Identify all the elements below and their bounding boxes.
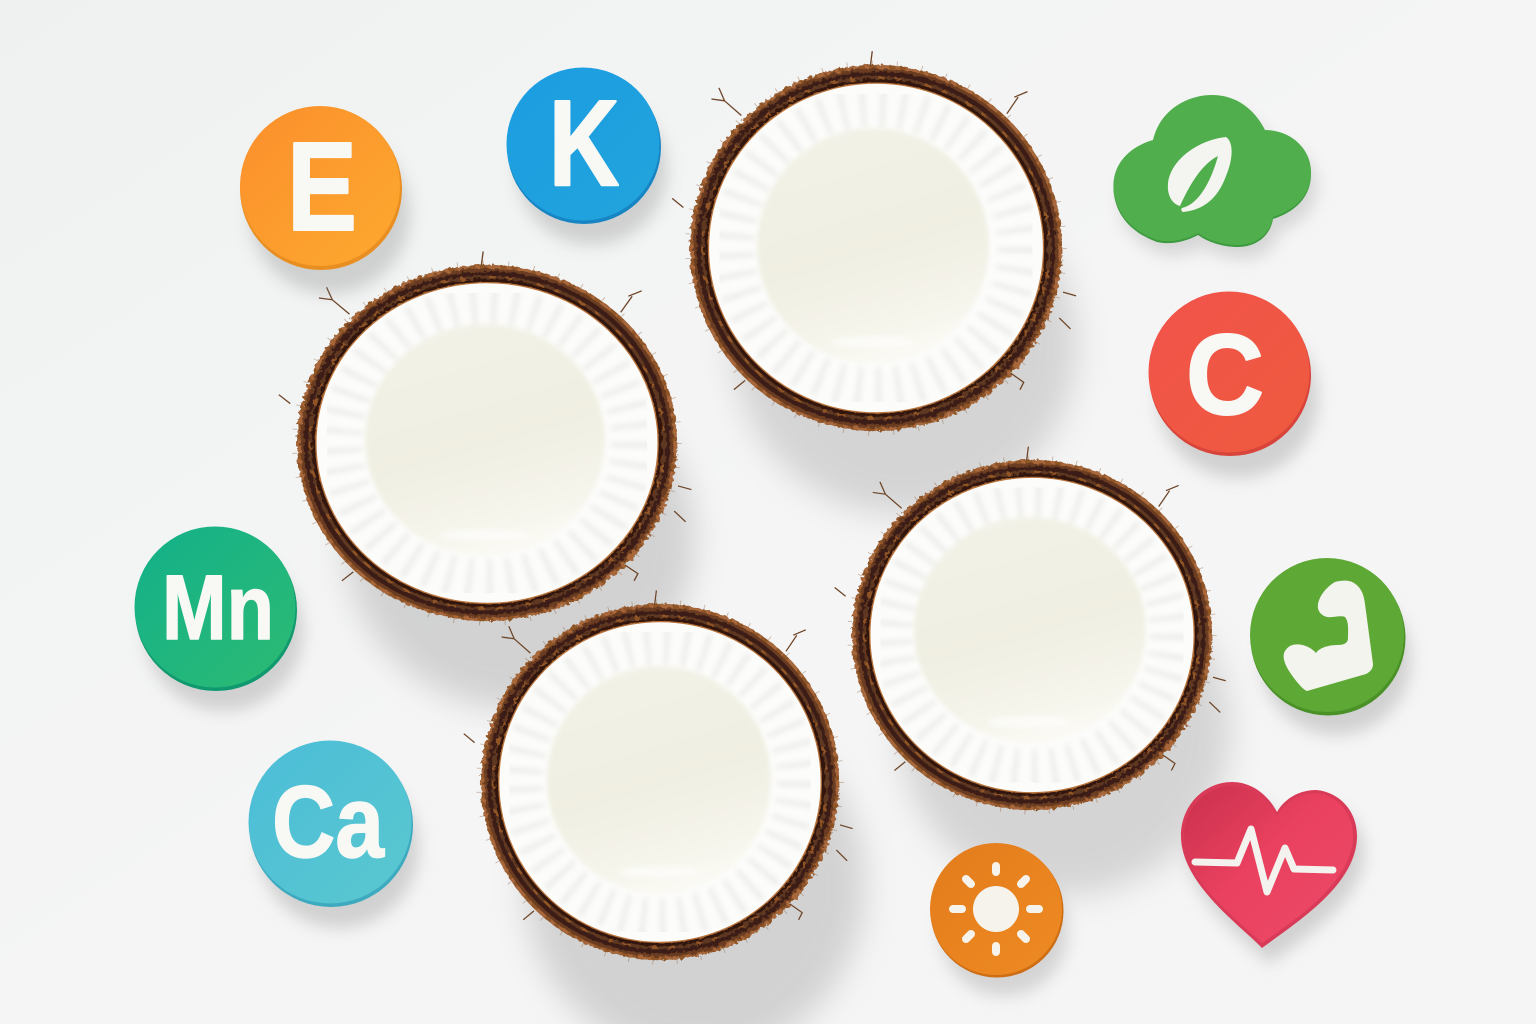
icon: flexed arm [1284, 581, 1373, 691]
coconut half: right [835, 447, 1226, 812]
coconut half: bottom [464, 590, 853, 962]
icon: leaf cloud [1113, 95, 1317, 259]
badge: vitamin C [1148, 292, 1318, 478]
badge: vitamin E: E [287, 116, 357, 257]
coconut half: top [672, 51, 1076, 433]
coconut cavity [757, 128, 989, 364]
coconut cavity [365, 324, 605, 556]
badge: calcium [248, 740, 419, 928]
icon: heart with pulse [1181, 782, 1364, 964]
coconut cast shadows [345, 175, 1230, 1024]
badge: vitamin K [506, 68, 667, 245]
badge: vitamin K: K [549, 75, 619, 211]
badge: manganese [134, 526, 303, 711]
badge: manganese: Mn [162, 557, 274, 659]
badge: sun [930, 843, 1068, 996]
icon: leaf [1168, 137, 1232, 212]
coconut cavity [547, 666, 771, 894]
badge: vitamin C: C [1186, 312, 1264, 439]
badge: calcium: Ca [272, 765, 385, 879]
badge: muscle [1250, 558, 1411, 735]
coconut cavity [914, 517, 1146, 743]
pulse line [1195, 829, 1333, 892]
coconut half: left [279, 251, 691, 623]
icon: sun [953, 866, 1039, 952]
badge: vitamin E [240, 106, 410, 294]
